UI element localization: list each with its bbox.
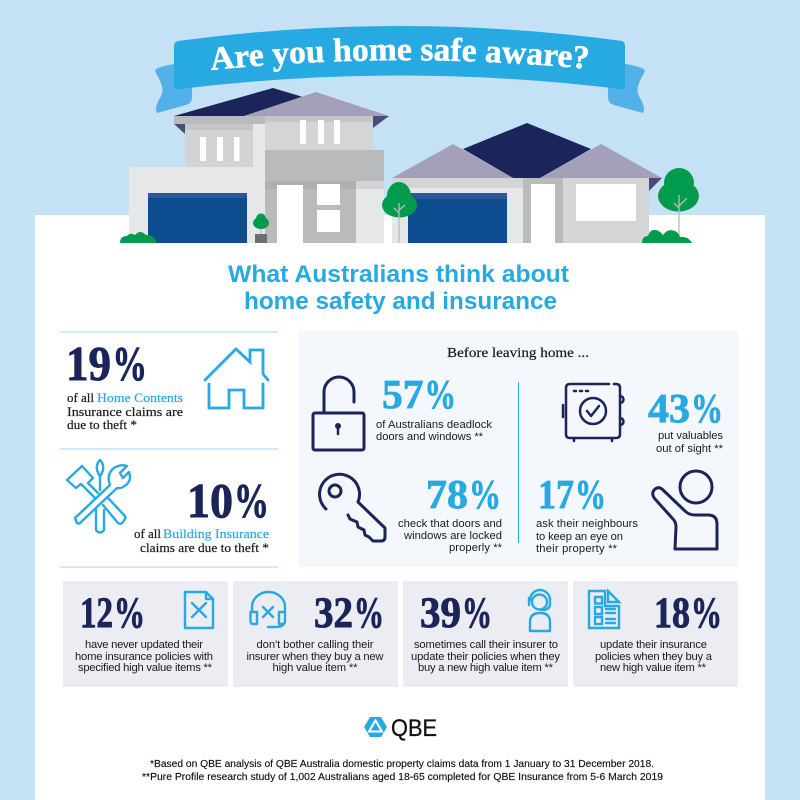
card: sometimes call: % (462, 590, 492, 637)
stat: 19 percent (66, 336, 183, 432)
card: sometimes call: buy a new high value item ** (418, 662, 554, 674)
stat: 57 percent: doors and windows ** (376, 431, 484, 443)
card: do not call: insurer when they buy a new (246, 651, 384, 663)
card: update policies (573, 581, 738, 687)
stat: 43 percent: out of sight ** (656, 443, 724, 455)
icon: call centre agent (529, 590, 550, 631)
right single-storey house (392, 123, 662, 243)
stat: 10 percent: 10 (187, 473, 233, 528)
card: do not call (233, 581, 398, 687)
stat: 19 percent: of all (67, 390, 94, 405)
stat: 57 percent: 57 (382, 371, 424, 417)
stat: 78 percent (398, 471, 503, 554)
card: update policies: new high value item ** (600, 662, 707, 674)
stat: 17 percent: to keep an eye on (536, 531, 623, 543)
stat: 10 percent: of all (134, 526, 161, 541)
main heading: home safety and insurance (244, 288, 557, 315)
left two-storey house (129, 88, 389, 243)
panel heading: Before leaving home ... (447, 346, 589, 361)
stat: 19 percent: Insurance claims are (67, 404, 183, 419)
stat: 19 percent: due to theft * (67, 417, 137, 432)
garage door (148, 193, 247, 243)
stat: 19 percent: Home Contents (97, 390, 183, 405)
icon: person waving (653, 471, 717, 549)
footnotes (142, 758, 663, 783)
stat: 17 percent: % (575, 471, 606, 517)
stat: 57 percent: % (424, 371, 456, 417)
stat: 43 percent: 43 (648, 385, 690, 431)
icon: safe (563, 384, 624, 441)
stat: 17 percent: ask their neighbours (536, 518, 638, 530)
icon: padlock (313, 377, 364, 450)
stat: 78 percent: 78 (426, 471, 468, 517)
stat: 78 percent: windows are locked (403, 530, 502, 542)
stat: 17 percent: their property ** (536, 543, 618, 555)
main heading: What Australians think about (228, 261, 569, 288)
stat: 19 percent: % (112, 336, 147, 391)
card: sometimes call (403, 581, 568, 687)
card: update policies: % (691, 590, 722, 637)
stat: 10 percent: % (234, 473, 269, 528)
icon: house (205, 349, 268, 408)
QBE logo: QBE (391, 715, 437, 742)
card: never updated: have never updated their (85, 639, 203, 651)
left theft statistics panel (60, 331, 278, 568)
card: do not call: don't bother calling their (256, 639, 374, 651)
card: never updated: 12 (80, 590, 113, 637)
card: never updated: % (114, 590, 145, 637)
before leaving home panel (298, 331, 738, 567)
icon: checklist (589, 591, 619, 628)
stat: 57 percent (376, 371, 492, 443)
stat: 10 percent (134, 473, 269, 555)
stat: 10 percent: claims are due to theft * (140, 540, 269, 555)
icon: key (320, 474, 385, 541)
banner title: Are you home safe aware? (210, 38, 588, 72)
card: sometimes call: update their policies when they (411, 651, 560, 663)
footnotes: *Based on QBE analysis of QBE Australia domestic property claims data from 1 January to 31 December 2018. (150, 758, 654, 770)
footnotes: **Pure Profile research study of 1,002 Australians aged 18-65 completed for QBE Insurance from 5-6 March 2019 (142, 771, 663, 783)
stat: 57 percent: of Australians deadlock (376, 419, 492, 431)
garage door (408, 193, 507, 243)
white content panel (35, 215, 765, 800)
icon: document cross (185, 592, 213, 628)
stat: 17 percent: 17 (538, 471, 574, 517)
stat: 43 percent (648, 385, 724, 455)
icon: headset cross (250, 592, 285, 627)
trees, plant and bushes (120, 168, 699, 243)
card: update policies: policies when they buy a (595, 651, 713, 663)
card: never updated: specified high value items ** (78, 662, 213, 674)
card: never updated (63, 581, 228, 687)
banner ribbon (155, 26, 645, 113)
stat: 78 percent: % (469, 471, 501, 517)
card: sometimes call: 39 (420, 590, 461, 637)
main heading (228, 261, 569, 315)
stat: 17 percent (536, 471, 638, 555)
stat: 19 percent: 19 (66, 336, 111, 391)
QBE logo (364, 715, 437, 742)
card: do not call: high value item ** (272, 662, 358, 674)
card: do not call: % (354, 590, 384, 637)
card: sometimes call: sometimes call their insurer to (414, 639, 558, 651)
stat: 78 percent: properly ** (449, 542, 503, 554)
card: do not call: 32 (314, 590, 353, 637)
card: update policies: 18 (654, 590, 690, 637)
stat: 78 percent: check that doors and (398, 518, 502, 530)
card: update policies: update their insurance (600, 639, 707, 651)
stat: 43 percent: % (691, 385, 723, 431)
stat: 10 percent: Building Insurance (163, 526, 269, 541)
icon: tools (67, 460, 130, 532)
card: never updated: home insurance policies with (75, 651, 213, 663)
stat: 43 percent: put valuables (658, 430, 723, 442)
